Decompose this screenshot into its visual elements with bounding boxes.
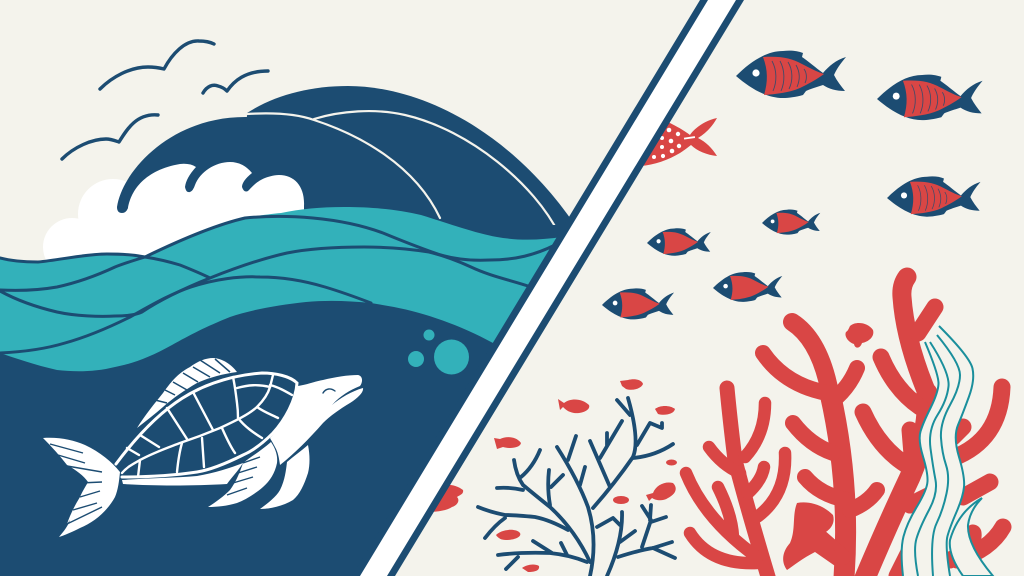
fish 1 (736, 51, 846, 98)
teal water (0, 207, 600, 371)
shell outline and plates (116, 373, 297, 477)
clipped red fish near the bottom (424, 485, 463, 512)
fish 4 (762, 210, 820, 235)
small red fish shoal (494, 323, 873, 572)
bubbles (408, 330, 469, 374)
fish 3 (887, 176, 980, 217)
seaweed ribbon main (902, 326, 973, 576)
panel: ocean scene (0, 41, 600, 576)
tail fin rays (50, 444, 102, 524)
navy branching coral (478, 398, 675, 576)
wave lines (0, 216, 555, 353)
fish 7 (602, 288, 674, 319)
front wave (117, 116, 247, 213)
front flipper ribs (227, 457, 260, 495)
seaweed (902, 326, 993, 576)
belly band (122, 463, 243, 486)
dorsal fin (137, 358, 237, 428)
birds (62, 41, 268, 159)
red coral right (860, 277, 1003, 576)
fish 2 (877, 75, 983, 120)
divider navy band (352, 0, 744, 576)
wave crest lines (247, 111, 559, 234)
seaweed strands (902, 326, 973, 576)
dorsal fin ribs (155, 359, 230, 403)
divider white band (360, 0, 736, 576)
school of red and navy fish (602, 51, 983, 319)
diagonal divider (352, 0, 744, 576)
fish-turtle creature (43, 358, 363, 537)
rear flipper (260, 445, 310, 509)
wave foam (128, 162, 304, 216)
head and neck (270, 375, 363, 465)
sea body (0, 225, 600, 576)
polka fish body (630, 115, 717, 166)
clouds (43, 179, 128, 260)
red coral left (686, 388, 785, 576)
front flipper (208, 442, 277, 507)
red coral middle (763, 322, 877, 576)
polka dots (652, 128, 695, 159)
back wave dome (246, 86, 569, 225)
seaweed ribbon small (950, 498, 993, 576)
eye (323, 389, 335, 393)
tail fin (43, 438, 120, 537)
clipped red fish behind divider: polka (630, 115, 717, 166)
fish 5 (647, 228, 711, 256)
red sea creature on coral (783, 502, 838, 570)
fish 6 (713, 272, 782, 302)
